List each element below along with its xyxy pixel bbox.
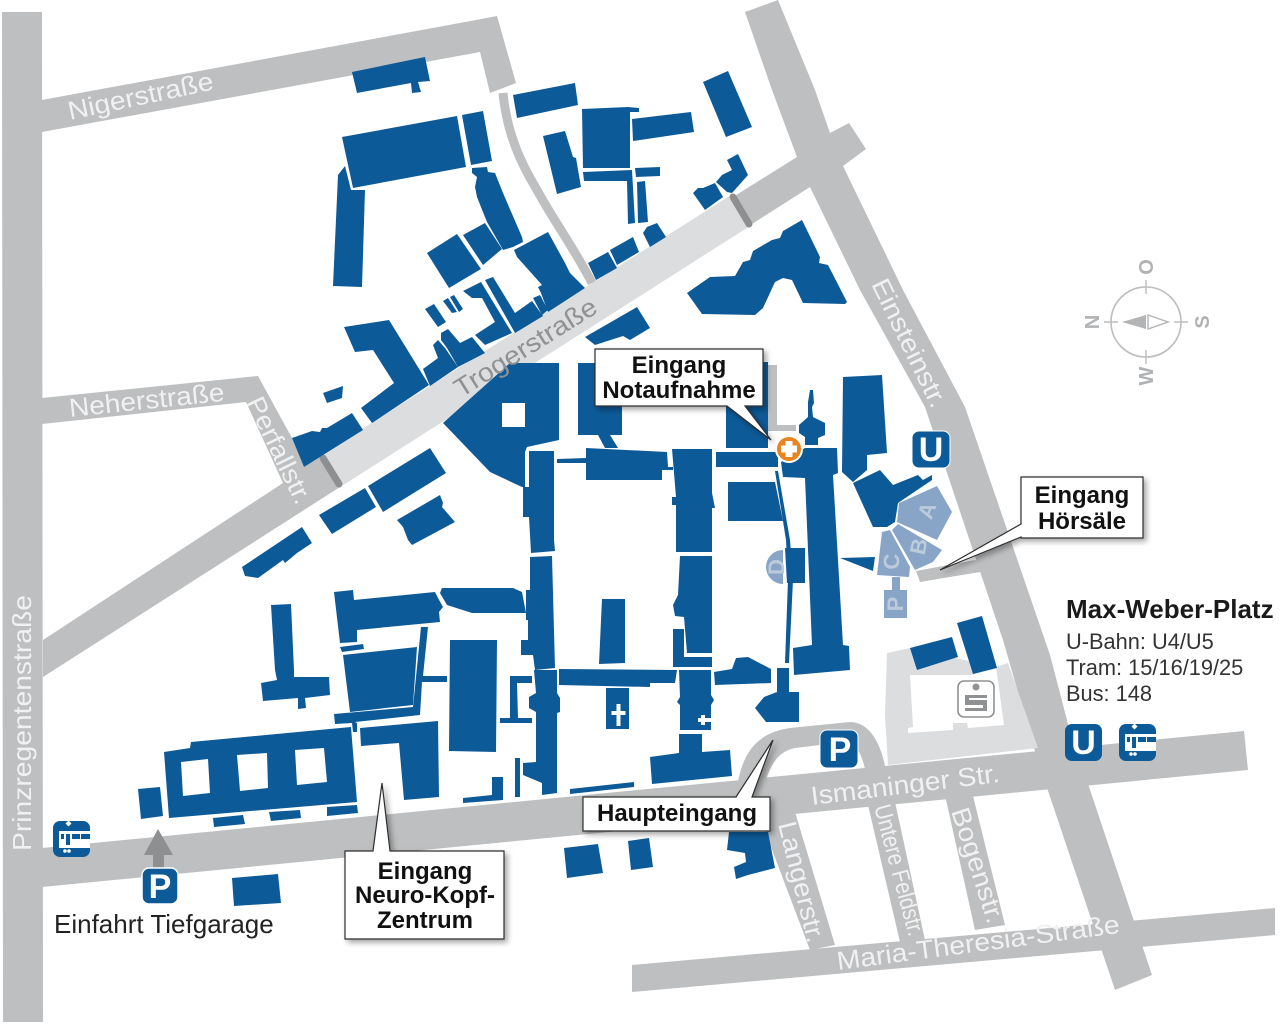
street labels: Einsteinstr.: [866, 273, 954, 412]
icon: Sparkasse: [958, 681, 994, 717]
icon: compass: W: [1136, 366, 1158, 385]
callout: Haupteingang: [583, 740, 773, 831]
icon: small chapel cross: [698, 715, 711, 725]
street labels: Bogenstr.: [945, 804, 1011, 927]
arrow: into underground garage: [144, 829, 173, 870]
callout: Eingang Neuro-Kopf-Zentrum: Eingang: [378, 858, 472, 885]
icon: U-Bahn Max-Weber-Platz: U: [1071, 724, 1096, 762]
icon: U-Bahn at Einsteinstrasse: [912, 431, 950, 469]
forecourt: Sparkasse area: [885, 648, 1038, 765]
callout: Eingang Hörsäle: Eingang: [1035, 482, 1129, 509]
callout: Eingang Hörsäle: Hörsäle: [1038, 508, 1126, 535]
callout: Eingang Neuro-Kopf-Zentrum: Zentrum: [377, 907, 473, 934]
lecture halls A B C D P: [764, 486, 952, 618]
street labels: Neherstraße: [67, 377, 226, 423]
lecture halls A B C D P: P: [883, 597, 908, 611]
callout: Haupteingang: Haupteingang: [597, 800, 757, 827]
text block: Max-Weber-Platz transit info: Tram: 15/16/19/25: [1066, 655, 1243, 680]
buildings: north campus: [292, 57, 847, 467]
lecture halls A B C D P: D: [764, 559, 789, 575]
street labels: Prinzregentenstraße: [7, 595, 37, 851]
callout: Eingang Neuro-Kopf-Zentrum: Neuro-Kopf-: [355, 882, 495, 909]
icon: U-Bahn Max-Weber-Platz: [1065, 724, 1102, 762]
callout: Eingang Neuro-Kopf-Zentrum: [345, 783, 504, 939]
icon: church with cross: [606, 688, 629, 729]
text block: Max-Weber-Platz transit info: [1066, 594, 1274, 706]
callout: Eingang Notaufnahme: [595, 349, 771, 440]
text block: Max-Weber-Platz transit info: U-Bahn: U4/U5: [1066, 629, 1214, 654]
lecture halls A B C D P: A: [912, 499, 941, 522]
icon: U-Bahn at Einsteinstrasse: U: [919, 431, 943, 469]
label: garage entrance: Einfahrt Tiefgarage: [54, 909, 274, 939]
icon: P underground garage: [142, 868, 178, 906]
buildings: along Trogerstrasse south side: [242, 363, 559, 578]
street labels: Trogerstraße: [448, 291, 602, 403]
buildings: southern hospital wings: [463, 657, 799, 879]
buildings: central hospital wings: [521, 362, 997, 675]
callout: Eingang Hörsäle: [940, 477, 1143, 570]
text block: Max-Weber-Platz transit info: Bus: 148: [1066, 681, 1152, 706]
buildings: neuro-head centre and west: [138, 588, 526, 906]
street labels: Untere Feldstr.: [868, 802, 929, 939]
icon: compass: S: [1192, 315, 1214, 329]
icon: P parking near main entrance: [820, 730, 858, 769]
street labels: Maria-Theresia-Straße: [835, 909, 1121, 976]
icon: compass: [1082, 259, 1214, 385]
icon: compass: N: [1082, 315, 1104, 329]
road: Trogerstrasse pedestrian section: [321, 195, 750, 487]
lecture halls A B C D P: C: [879, 553, 904, 570]
icon: tram west: [53, 820, 90, 857]
icon: compass: O: [1136, 259, 1158, 275]
icon: P underground garage: P: [149, 868, 171, 906]
icon: emergency cross: [776, 436, 802, 462]
street labels: Langerstr.: [772, 818, 831, 946]
street labels: Nigerstraße: [65, 66, 216, 126]
street labels: Ismaninger Str.: [809, 758, 1001, 811]
icon: P parking near main entrance: P: [829, 731, 851, 769]
street labels: [7, 66, 1121, 976]
text block: Max-Weber-Platz transit info: Max-Weber-Platz: [1066, 594, 1274, 624]
street labels: Perfallstr.: [241, 391, 318, 509]
callout: Eingang Notaufnahme: Notaufnahme: [602, 377, 756, 404]
callout: Eingang Notaufnahme: Eingang: [632, 352, 726, 379]
road markers: barriers on Trogerstrasse: [323, 197, 749, 484]
icon: tram Max-Weber-Platz: [1119, 724, 1156, 761]
lecture halls A B C D P: B: [905, 536, 933, 557]
